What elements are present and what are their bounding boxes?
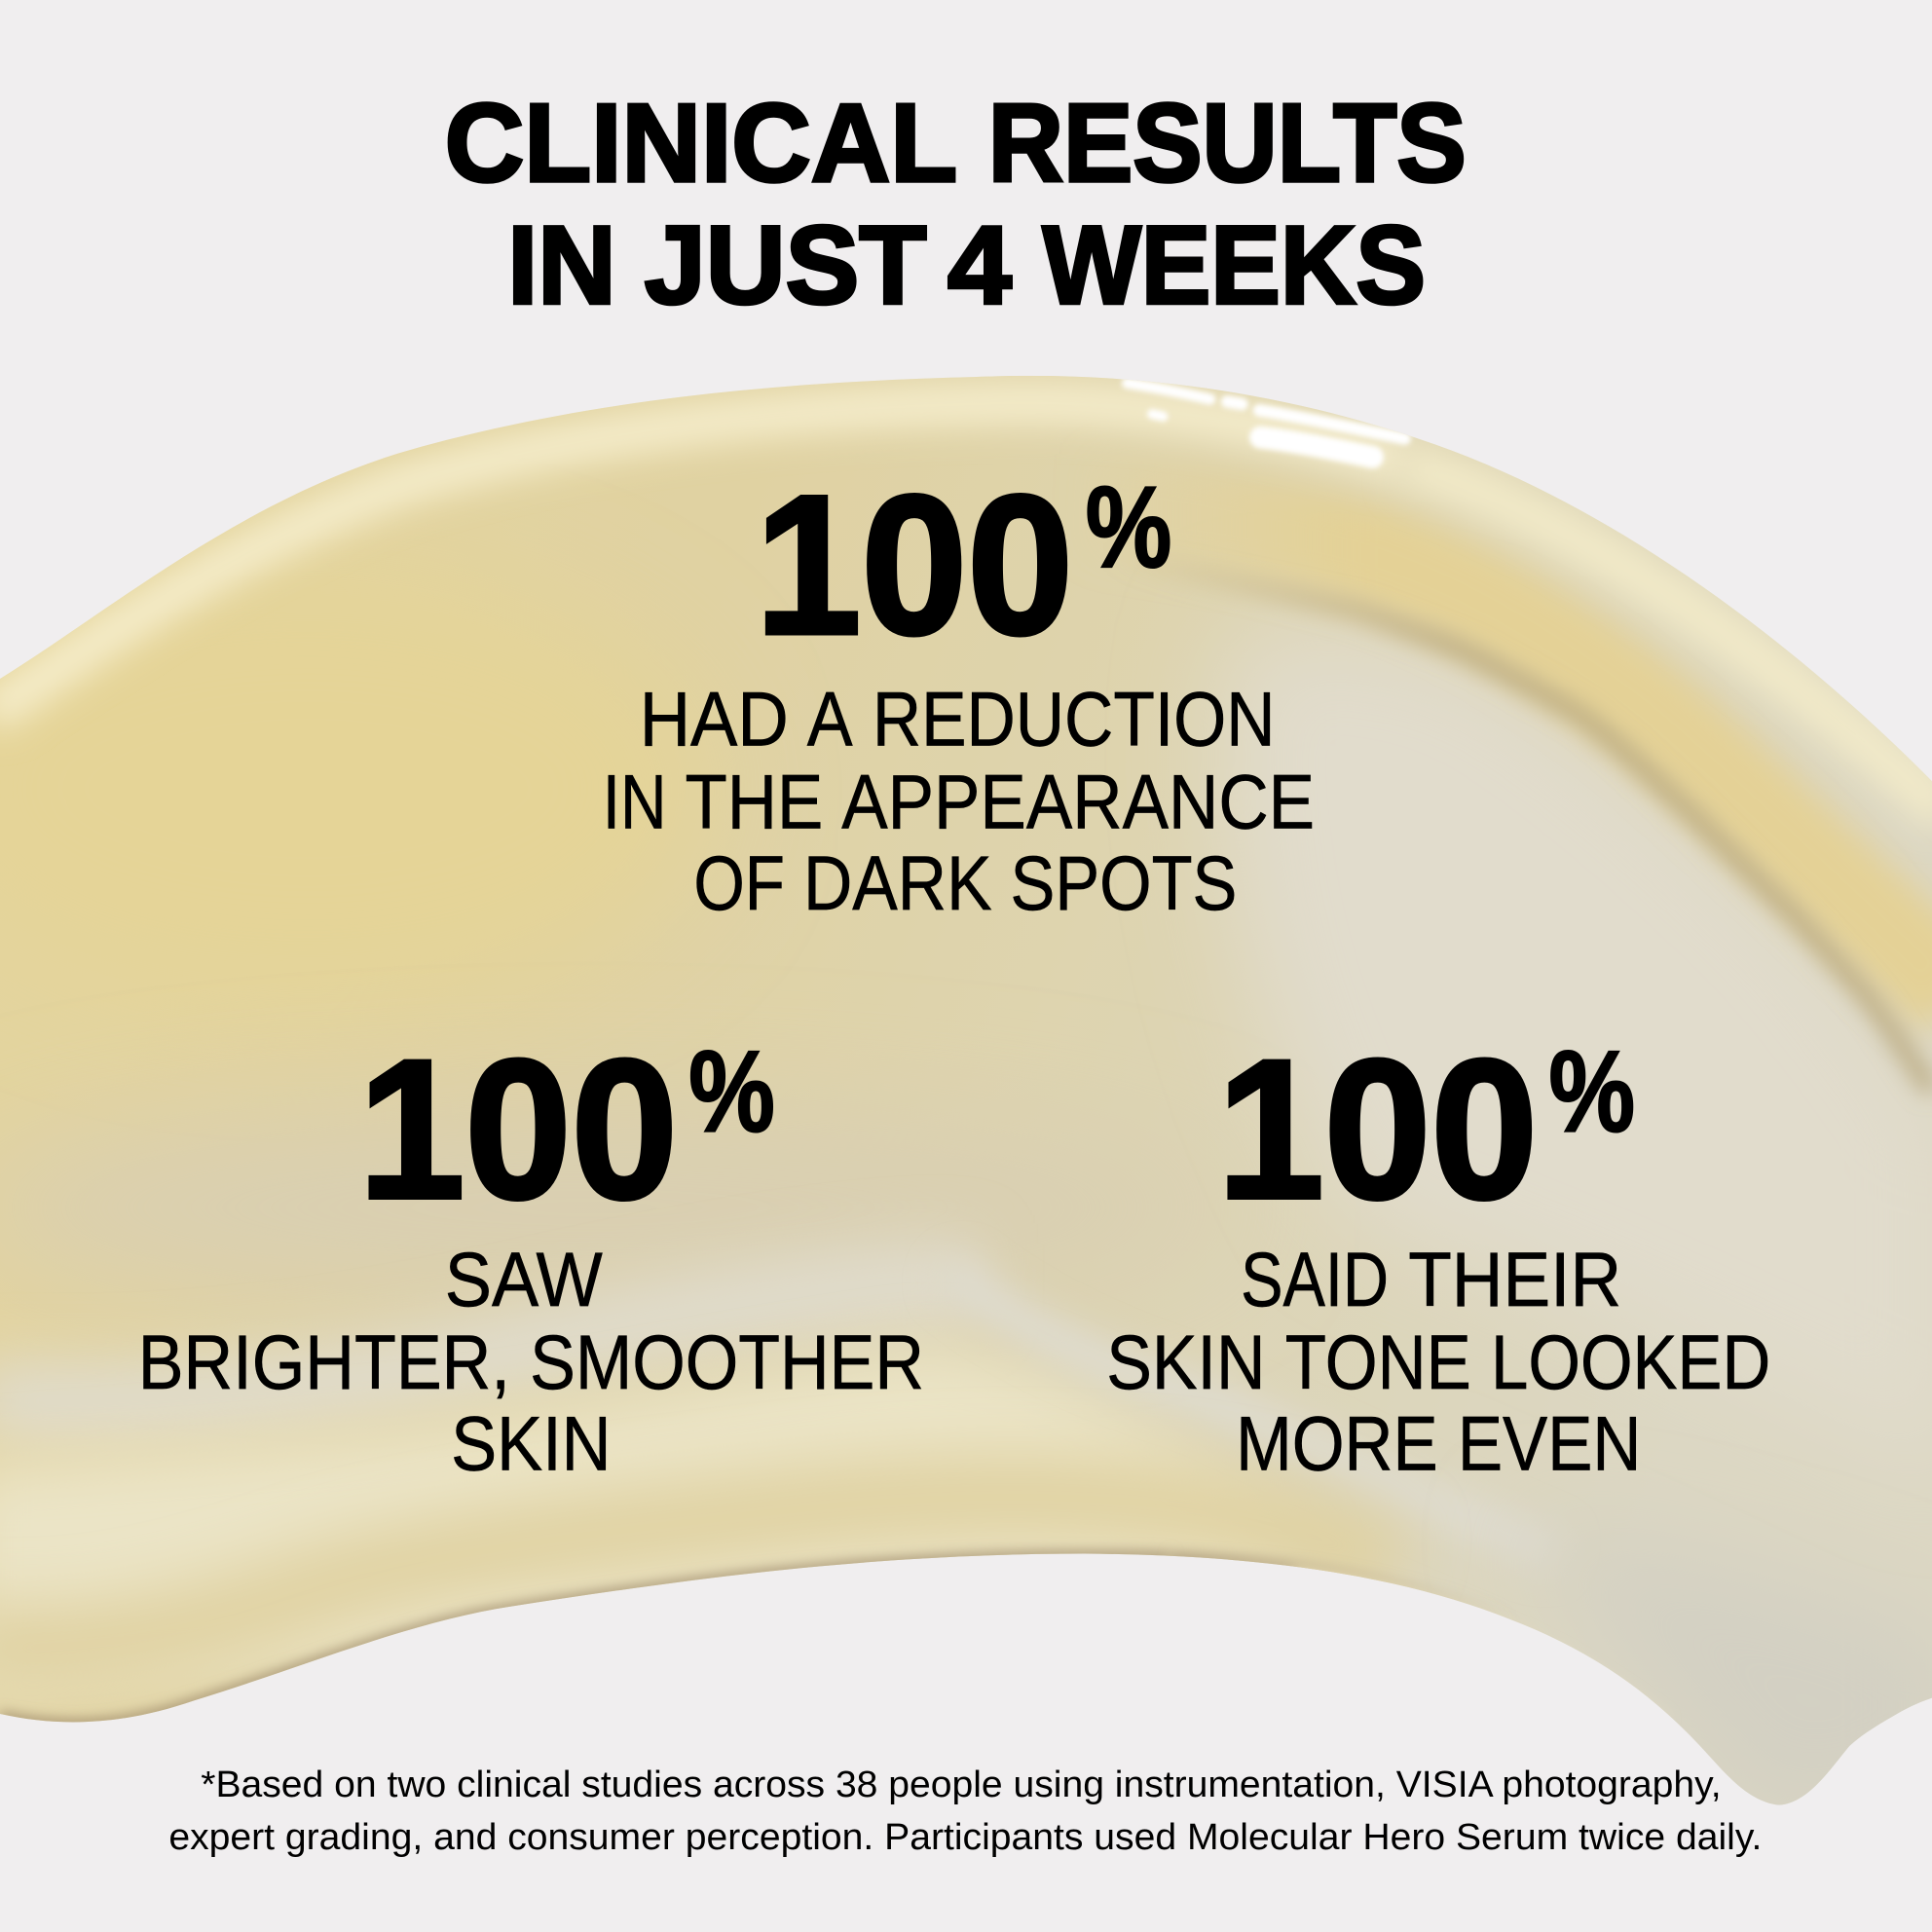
serum swatch	[0, 345, 1932, 1836]
percent: %	[1548, 1027, 1635, 1157]
description: SMOOTHER	[530, 1319, 924, 1405]
description	[138, 1237, 924, 1487]
title: 4	[947, 204, 1012, 327]
swatch: bottom shadow edge fading right	[1170, 1557, 1515, 1621]
swatch: tan mid zone	[4, 1104, 783, 1301]
description: SPOTS	[1011, 840, 1237, 926]
swatch: warm left body	[1, 600, 668, 947]
number: 100	[1217, 1020, 1538, 1241]
description: BRIGHTER,	[138, 1319, 510, 1405]
description: SKIN	[451, 1401, 612, 1487]
description: LOOKED	[1491, 1319, 1770, 1405]
footnote	[168, 1765, 1762, 1858]
title: WEEKS	[1042, 204, 1426, 327]
description: SKIN	[1106, 1319, 1265, 1405]
description: THE	[686, 759, 823, 844]
swatch: bottom yellow band	[0, 1497, 1393, 1648]
swatch: top highlights	[1128, 384, 1404, 457]
description: SAW	[445, 1237, 603, 1322]
swatch: lower cream hump	[0, 1350, 1302, 1700]
title	[445, 82, 1467, 327]
title: CLINICAL	[445, 82, 957, 205]
description: REDUCTION	[873, 677, 1276, 762]
stat: even skin tone	[1106, 1020, 1770, 1487]
number: 100	[358, 1020, 678, 1241]
swatch: brown shadow under rim	[1215, 576, 1932, 1100]
description	[603, 677, 1315, 926]
description: A	[807, 677, 853, 762]
description	[1106, 1237, 1770, 1487]
description: HAD	[640, 677, 789, 762]
description: APPEARANCE	[841, 759, 1315, 844]
stat: brighter skin	[138, 1020, 924, 1487]
swatch: golden rim band right	[1084, 505, 1932, 998]
percent: %	[688, 1027, 775, 1157]
description: IN	[603, 759, 667, 844]
swatch: diagonal pale streak	[948, 1269, 1557, 1555]
swatch: top rim glow left and centre	[0, 403, 1404, 715]
number: 100	[756, 455, 1073, 676]
description: EVEN	[1458, 1401, 1641, 1487]
title: JUST	[645, 204, 927, 327]
swatch: grey lower right	[1696, 1630, 1915, 1772]
title: RESULTS	[988, 82, 1467, 205]
swatch: bottom shadow edge left	[0, 1556, 1170, 1725]
percent: %	[1086, 463, 1171, 592]
description: DARK	[803, 840, 992, 926]
swatch: pale right scrape	[1196, 610, 1908, 1364]
title: IN	[507, 204, 616, 327]
description: THEIR	[1408, 1237, 1621, 1322]
footnote: expert grading, and consumer perception. Participants used Molecular Hero Serum twice daily.	[168, 1817, 1762, 1858]
description: TONE	[1285, 1319, 1471, 1405]
stat: dark spots	[603, 455, 1315, 926]
description: SAID	[1241, 1237, 1389, 1322]
description: MORE	[1236, 1401, 1438, 1487]
swatch: top rim glow right	[1404, 464, 1932, 813]
footnote: *Based on two clinical studies across 38 people using instrumentation, VISIA photography,	[201, 1765, 1722, 1805]
swatch: lower right edge tint	[1294, 1575, 1663, 1725]
description: OF	[693, 840, 785, 926]
swatch: pale lower-left mid band	[0, 1282, 974, 1401]
